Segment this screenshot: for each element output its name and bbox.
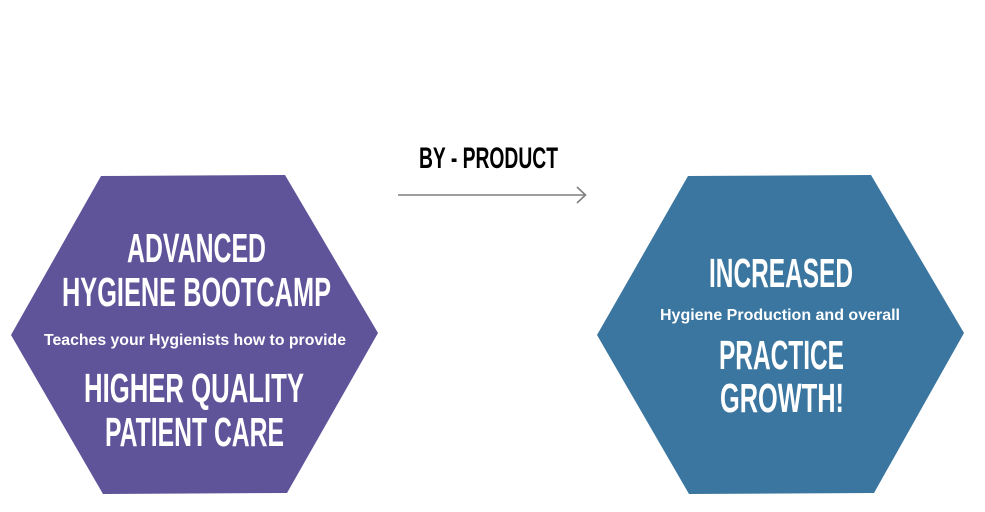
text block: teaches hygienists: Teaches your Hygienists how to provide (44, 332, 346, 349)
heading: higher quality patient care: HIGHER QUALITY (84, 365, 304, 411)
arrow: by-product (398, 187, 586, 203)
heading: increased: INCREASED (709, 250, 853, 296)
panel: increased growth hexagon (597, 175, 964, 494)
text block: hygiene production: Hygiene Production and overall (660, 307, 900, 324)
heading: practice growth: PRACTICE (719, 332, 844, 378)
heading: advanced hygiene bootcamp (62, 225, 331, 315)
panel: advanced hygiene bootcamp hexagon (11, 175, 378, 494)
heading: practice growth (719, 332, 844, 421)
heading: advanced hygiene bootcamp: ADVANCED (127, 225, 266, 271)
heading: advanced hygiene bootcamp: HYGIENE BOOTCAMP (62, 269, 331, 315)
heading: higher quality patient care (84, 365, 304, 455)
heading: higher quality patient care: PATIENT CARE (105, 409, 284, 455)
heading: by-product: BY - PRODUCT (419, 142, 558, 175)
heading: practice growth: GROWTH! (720, 375, 844, 421)
